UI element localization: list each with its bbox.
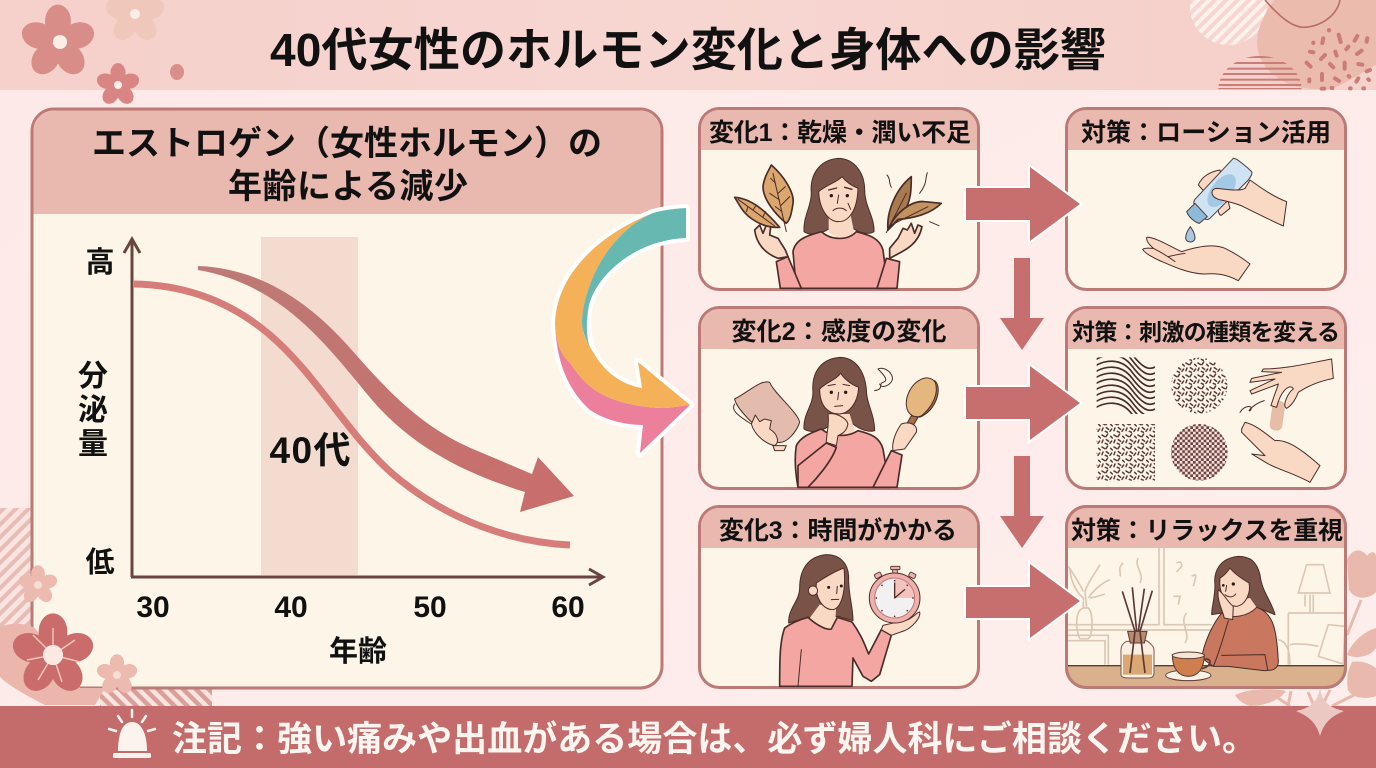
arrow orange band (555, 213, 690, 408)
decoration: flowers over panel corner (0, 565, 139, 705)
title: 40代女性のホルモン変化と身体への影響 (270, 24, 1106, 76)
panel heading background (34, 110, 660, 214)
illustration: worried woman with dry leaves (735, 158, 941, 288)
arrow: change 2 to remedy 2 (966, 366, 1080, 440)
card: remedy 3 relaxation (1065, 506, 1346, 689)
card heading (1068, 508, 1344, 548)
card heading (701, 508, 977, 548)
card title: 変化3：時間がかかる (719, 516, 957, 545)
x axis ticks (136, 591, 585, 624)
arrow white outline (555, 208, 690, 453)
card title: 対策：ローション活用 (1081, 119, 1331, 147)
arrow: change 1 to remedy 1 (966, 167, 1080, 241)
illustration: textures and hands (1092, 343, 1333, 482)
illustration: relaxing woman with tea and diffuser (1065, 548, 1346, 689)
arrow: down remedy flow 2 (1000, 456, 1044, 548)
arrow: change 3 to remedy 3 (966, 564, 1080, 638)
illustration: upper hand with applicator (1250, 359, 1333, 431)
woman (1202, 556, 1278, 671)
header band (0, 0, 1376, 107)
label: secretion amount: 泌 (78, 394, 108, 427)
arrow pink band (555, 323, 690, 453)
x axis ticks: 40 (274, 591, 308, 624)
texture: checker circle (1171, 424, 1228, 481)
card title: 変化1：乾燥・潤い不足 (709, 119, 971, 147)
x axis title: 年齢 (329, 635, 387, 668)
chart: estrogen curve (134, 284, 570, 545)
decoration: bottom-left stripes (0, 508, 212, 706)
curved rainbow arrow (555, 208, 690, 453)
decoration: bottom-right botanical (1235, 550, 1376, 706)
card heading (1068, 110, 1344, 150)
x axis ticks: 50 (413, 591, 447, 624)
label: secretion amount: 量 (78, 428, 108, 461)
card title: 対策：刺激の種類を変える (1072, 319, 1340, 345)
illustration: thinking woman with cloth and brush (734, 357, 944, 487)
illustration: lotion bottle and hands (1143, 158, 1287, 281)
icon: alert siren (109, 710, 155, 758)
label: secretion amount: 分 (78, 360, 108, 393)
label: high: 高 (85, 246, 115, 279)
decoration: sparkle (1296, 688, 1344, 736)
panel: estrogen chart (32, 109, 662, 688)
note text: 注記：強い痛みや出血がある場合は、必ず婦人科にご相談ください。 (172, 720, 1257, 759)
chart: x axis (131, 569, 603, 585)
card title: 変化2：感度の変化 (732, 318, 946, 346)
illustration: lower hand (1242, 422, 1320, 482)
diffuser (1121, 587, 1154, 678)
illustration: woman with stopwatch (780, 555, 920, 686)
card: change 2 sensitivity (700, 308, 978, 488)
arrow: down remedy flow 1 (1000, 258, 1044, 350)
label: secretion amount (78, 360, 108, 461)
tea cup (1166, 652, 1211, 681)
chart: 40s highlight band (261, 237, 358, 575)
panel heading: 年齢による減少 (228, 168, 468, 206)
texture: waves (1096, 357, 1155, 414)
card heading (1068, 309, 1344, 349)
table (1068, 666, 1344, 686)
room background (1065, 548, 1345, 665)
arrow teal band (582, 208, 686, 347)
label: 40s: 40代 (270, 430, 350, 471)
card title: 対策：リラックスを重視 (1071, 517, 1343, 545)
card: remedy 1 lotion (1066, 108, 1346, 290)
footer note bar (0, 688, 1376, 768)
card: remedy 2 stimulation types (1066, 308, 1346, 488)
card heading (701, 110, 977, 150)
texture: speckle circle (1171, 358, 1227, 414)
texture: speckle square (1097, 424, 1155, 481)
chart: y axis (124, 239, 140, 577)
decoration: top-left flowers (18, 0, 184, 107)
decoration: top-right shapes (1190, 0, 1376, 89)
x axis ticks: 60 (551, 591, 585, 624)
chart: decline arrow (198, 266, 574, 512)
panel heading: エストロゲン（女性ホルモン）の (92, 125, 602, 163)
card: change 3 takes time (700, 506, 978, 688)
panel heading (92, 125, 602, 206)
x axis ticks: 30 (136, 591, 170, 624)
card heading (701, 309, 977, 349)
label: low: 低 (85, 546, 115, 579)
card: change 1 dryness (700, 108, 978, 290)
